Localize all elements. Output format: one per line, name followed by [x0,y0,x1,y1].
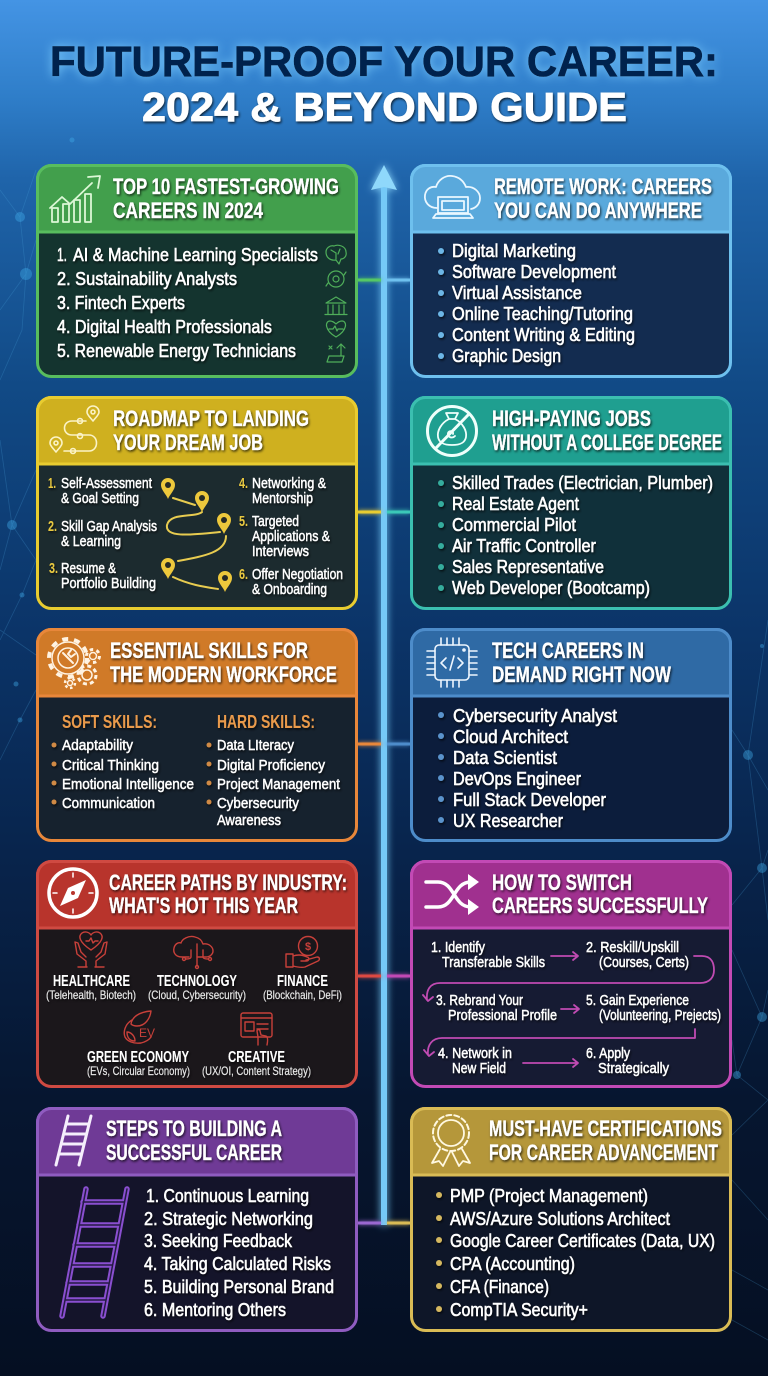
heading [110,638,337,687]
heading [492,638,671,687]
career steps list: 2. Strategic Networking [144,1208,313,1229]
roadmap steps: & Onboarding [252,581,327,598]
remote career list: Content Writing & Editing [452,324,635,345]
panel: steps to building a career [38,1108,356,1330]
heading: DEMAND RIGHT NOW [492,662,671,687]
industry: creative: CREATIVE [228,1049,285,1066]
heading [492,406,722,455]
industry: finance: FINANCE [277,973,328,990]
panel: high-paying jobs [412,398,730,608]
switching steps: (Volunteering, Prejects) [599,1007,721,1024]
heading: WHAT'S HOT THIS YEAR [109,893,298,918]
career steps list: 4. Taking Calculated Risks [144,1253,331,1274]
career list: 3. Fintech Experts [57,292,185,313]
heading: CAREER PATHS BY INDUSTRY: [109,870,347,895]
industry: technology: (Cloud, Cybersecurity) [148,988,246,1002]
career steps list: 1. Continuous Learning [146,1185,309,1206]
career steps list: 5. Building Personal Brand [144,1276,334,1297]
title [50,38,718,130]
icon: chip [427,638,477,687]
roadmap steps: Interviews [252,543,309,560]
panel: top 10 fastest-growing careers [38,166,356,376]
panel: tech careers [412,630,730,840]
hard skills column: Cybersecurity [217,795,299,812]
panel: roadmap [38,398,356,608]
heading: YOU CAN DO ANYWHERE [494,198,702,223]
title: FUTURE-PROOF YOUR CAREER: [50,38,718,86]
roadmap steps: 4. [239,475,248,492]
industry: healthcare: (Telehealth, Biotech) [46,988,136,1002]
roadmap steps: Portfolio Building [61,575,156,592]
central upward arrow [371,165,397,1225]
industry: creative: (UX/OI, Content Strategy) [202,1064,311,1078]
roadmap steps: 5. [239,513,248,530]
switching steps: 4. Network in [438,1045,512,1062]
jobs list: Web Developer (Bootcamp) [452,577,650,598]
industry: technology: TECHNOLOGY [157,973,237,990]
heading: TOP 10 FASTEST-GROWING [113,174,339,199]
tech careers list: DevOps Engineer [453,768,581,789]
industry: healthcare [46,932,136,1002]
roadmap steps: Networking & [252,475,326,492]
soft skills column: SOFT SKILLS: [62,712,157,732]
roadmap steps: Targeted [252,513,299,530]
jobs list: Air Traffic Controller [452,535,596,556]
hard skills column: Data LIteracy [217,737,294,754]
panel: remote work [412,166,730,376]
industry: green economy: EV [139,1026,155,1040]
panel: career paths by industry [38,862,356,1086]
switching steps: (Courses, Certs) [599,954,689,971]
career steps list [144,1185,334,1320]
jobs list: Commercial Pilot [452,514,576,535]
panel: essential skills [38,630,356,840]
icon: growth chart [50,176,100,222]
roadmap steps: Applications & [252,528,330,545]
roadmap steps: Skill Gap Analysis [61,518,157,535]
heading: YOUR DREAM JOB [113,430,263,455]
certifications list: CFA (Finance) [450,1276,549,1297]
heading: THE MODERN WORKFORCE [110,662,337,687]
industry: healthcare: HEALTHCARE [53,973,130,990]
career steps list: 3. Seeking Feedback [144,1230,293,1251]
icon: compass [49,869,97,917]
jobs list: Skilled Trades (Electrician, Plumber) [452,472,713,493]
roadmap steps: 6. [239,566,248,583]
icon: no money bag [428,406,476,456]
soft skills column: Critical Thinking [62,757,159,774]
remote career list [438,240,635,366]
icon: award ribbon [432,1115,470,1166]
certifications list [436,1185,715,1320]
industry: finance: (Blockchain, DeFi) [263,988,342,1002]
career list: 5. Renewable Energy Technicians [57,340,296,361]
industry: creative [202,1013,311,1078]
panel: must-have certifications [412,1108,730,1330]
jobs list: Real Estate Agent [452,493,579,514]
certifications list: PMP (Project Management) [450,1185,648,1206]
industry: green economy: GREEN ECONOMY [87,1049,189,1066]
certifications list: CPA (Accounting) [450,1253,575,1274]
heading: HIGH-PAYING JOBS [492,406,651,431]
certifications list: Google Career Certificates (Data, UX) [450,1230,715,1251]
heading: ROADMAP TO LANDING [113,406,309,431]
tech careers list: Cybersecurity Analyst [453,705,617,726]
hard skills column: Awareness [217,812,281,829]
heading: ESSENTIAL SKILLS FOR [110,638,308,663]
roadmap steps: 2. [48,518,57,535]
industry: technology [148,936,246,1002]
roadmap steps: & Goal Setting [61,490,139,507]
soft skills column: Communication [62,795,155,812]
illustration: purple ladder [62,1189,127,1316]
icon: shuffle arrows [426,874,479,915]
certifications list: AWS/Azure Solutions Architect [450,1208,670,1229]
industry: finance [263,936,342,1002]
panel: how to switch careers [412,862,730,1086]
switching steps: Professional Profile [448,1007,557,1024]
remote career list: Virtual Assistance [452,282,582,303]
soft skills column: Adaptability [62,737,133,754]
career list: 4. Digital Health Professionals [57,316,272,337]
icon: ladder [56,1116,91,1165]
heading: STEPS TO BUILDING A [106,1116,282,1141]
soft skills column: Emotional Intelligence [62,776,194,793]
career list: AI & Machine Learning Specialists [73,244,318,265]
heading: SUCCESSFUL CAREER [106,1140,282,1165]
heading [106,1116,282,1165]
icons: career list [325,245,347,362]
remote career list: Graphic Design [452,345,561,366]
jobs list: Sales Representative [452,556,604,577]
industry: green economy [87,1011,190,1078]
hard skills column [206,712,341,829]
tech careers list: Cloud Architect [453,726,568,747]
roadmap steps: 3. [49,560,58,577]
switching steps: 2. Reskill/Upskill [586,939,679,956]
switching steps: 3. Rebrand Your [436,992,523,1009]
career list: 2. Sustainability Analysts [57,268,237,289]
roadmap path with pins [161,478,232,592]
roadmap steps: 1. [48,475,56,492]
hard skills column: Digital Proficiency [217,757,325,774]
tech careers list [438,705,617,831]
roadmap steps: Self-Assessment [61,475,153,492]
soft skills column [52,712,194,812]
career steps list: 6. Mentoring Others [144,1299,286,1320]
tech careers list: UX Researcher [453,810,563,831]
switching steps: Strategically [598,1060,669,1077]
career list [57,244,318,361]
career list: 1. [57,244,67,265]
industry: finance: $ [305,941,311,953]
remote career list: Software Development [452,261,616,282]
heading [109,870,347,918]
tech careers list: Data Scientist [453,747,557,768]
industry: green economy: (EVs, Circular Economy) [87,1064,190,1078]
certifications list: CompTIA Security+ [450,1299,588,1320]
heading [113,174,339,223]
switching steps: 5. Gain Experience [586,992,689,1009]
roadmap steps: Resume & [61,560,116,577]
switching steps: 6. Apply [586,1045,630,1062]
roadmap steps: Offer Negotiation [252,566,343,583]
heading [492,870,708,918]
switching flow arrows [423,952,714,1067]
heading [113,406,309,455]
heading [494,174,712,223]
heading: CAREERS IN 2024 [113,198,264,223]
switching steps: New Field [452,1060,506,1077]
heading: TECH CAREERS IN [492,638,644,663]
roadmap steps [48,475,343,598]
tech careers list: Full Stack Developer [453,789,606,810]
connectors from panels to the arrow [358,280,410,1223]
hard skills column: Project Management [217,776,341,793]
icon: cloud laptop [425,176,480,218]
switching steps [431,939,721,1077]
hard skills column: HARD SKILLS: [217,712,315,732]
remote career list: Digital Marketing [452,240,576,261]
heading [489,1116,722,1165]
heading: HOW TO SWITCH [492,870,632,895]
title: 2024 & BEYOND GUIDE [142,84,627,130]
switching steps: 1. Identify [431,939,485,956]
icon: gears [49,639,100,688]
remote career list: Online Teaching/Tutoring [452,303,633,324]
roadmap steps: & Learning [61,533,121,550]
jobs list [438,472,713,598]
roadmap steps: Mentorship [252,490,313,507]
icon: route [50,406,99,454]
switching steps: Transferable Skills [442,954,545,971]
